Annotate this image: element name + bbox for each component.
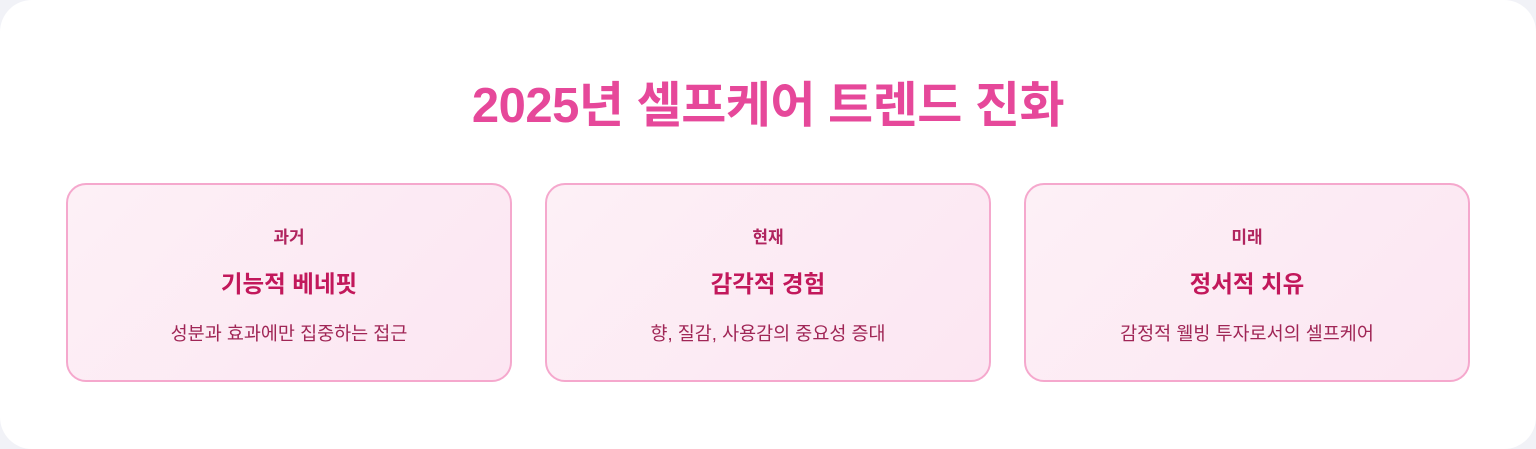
title: 2025년 셀프케어 트렌드 진화 [472,79,1064,133]
heading: sensory experience: 감각적 경험 [711,271,825,297]
panel: past [66,183,512,382]
heading: emotional healing: 정서적 치유 [1190,271,1304,297]
panel: future [1024,183,1470,382]
heading: functional benefit: 기능적 베네핏 [221,271,357,297]
description: past: 성분과 효과에만 집중하는 접근 [171,323,407,344]
description: future: 감정적 웰빙 투자로서의 셀프케어 [1120,323,1374,344]
label: present: 현재 [752,228,784,247]
label: future: 미래 [1231,228,1263,247]
panel: present [545,183,991,382]
label: past: 과거 [273,228,305,247]
description: present: 향, 질감, 사용감의 중요성 증대 [650,323,886,344]
